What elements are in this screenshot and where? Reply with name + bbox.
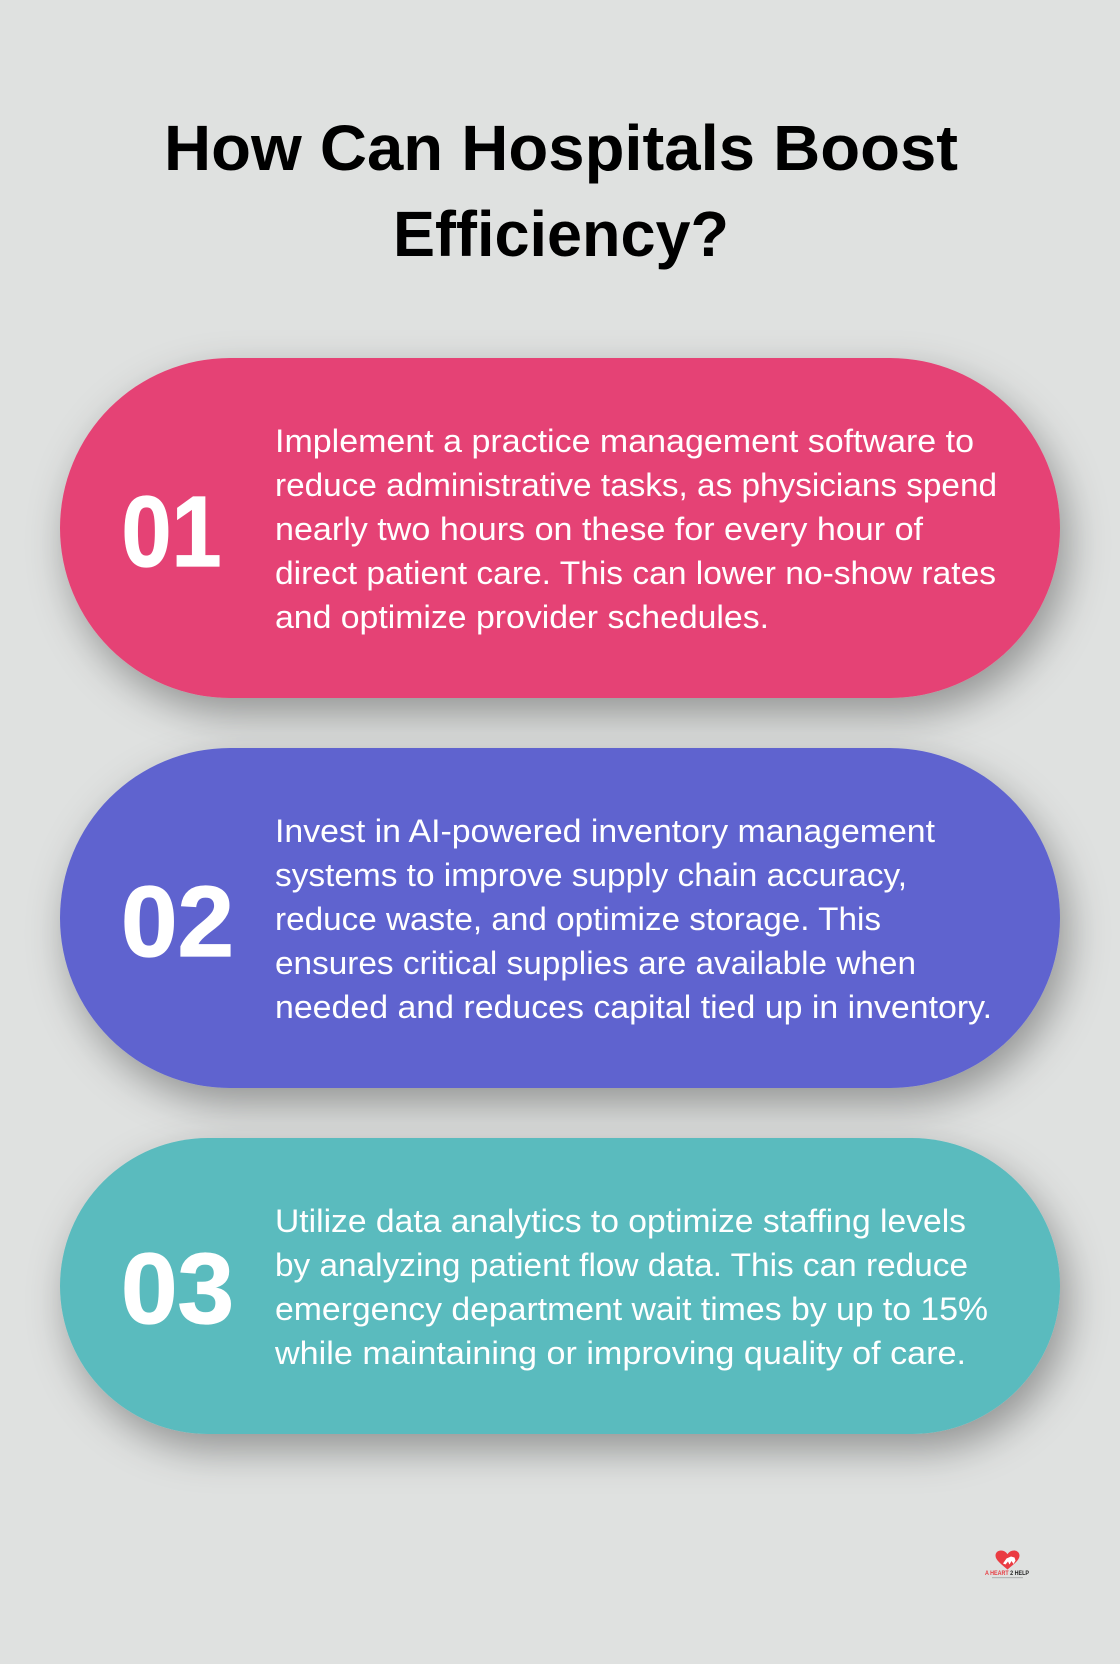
panel: step 02 (60, 748, 1060, 1088)
purple pill background (60, 748, 1060, 1088)
title: How Can Hospitals Boost (164, 112, 958, 184)
text block: step 01 description (275, 423, 997, 635)
teal pill background (60, 1138, 1060, 1434)
number 03: 03 (121, 1233, 234, 1345)
number 01: 01 (122, 476, 222, 588)
text block: step 02 description: needed and reduces capital tied up in inventory. (275, 989, 992, 1025)
logo: A Heart 2 Help (985, 1550, 1030, 1578)
panel: step 01 (60, 358, 1060, 698)
text block: step 02 description: ensures critical supplies are available when (275, 945, 916, 981)
text block: step 01 description: and optimize provider schedules. (275, 599, 769, 635)
logo wordmark: A HEART 2 HELP (985, 1570, 1030, 1577)
text block: step 02 description (275, 813, 992, 1025)
panel: step 03 (60, 1138, 1060, 1434)
text block: step 02 description: systems to improve supply chain accuracy, (275, 857, 907, 893)
pink pill background (60, 358, 1060, 698)
text block: step 01 description: Implement a practice management software to (275, 423, 974, 459)
number 02: 02 (121, 866, 234, 978)
text block: step 03 description (274, 1203, 988, 1371)
text block: step 01 description: reduce administrative tasks, as physicians spend (275, 467, 997, 503)
text block: step 03 description: Utilize data analytics to optimize staffing levels (275, 1203, 966, 1239)
title: Efficiency? (393, 198, 729, 270)
text block: step 03 description: while maintaining or improving quality of care. (274, 1335, 966, 1371)
title (164, 112, 958, 270)
text block: step 03 description: emergency department wait times by up to 15% (275, 1291, 988, 1327)
text block: step 01 description: direct patient care. This can lower no-show rates (275, 555, 996, 591)
text block: step 03 description: by analyzing patient flow data. This can reduce (275, 1247, 968, 1283)
text block: step 02 description: Invest in AI-powered inventory management (275, 813, 935, 849)
icon: heart (996, 1550, 1020, 1570)
text block: step 01 description: nearly two hours on these for every hour of (275, 511, 923, 547)
text block: step 02 description: reduce waste, and optimize storage. This (275, 901, 881, 937)
